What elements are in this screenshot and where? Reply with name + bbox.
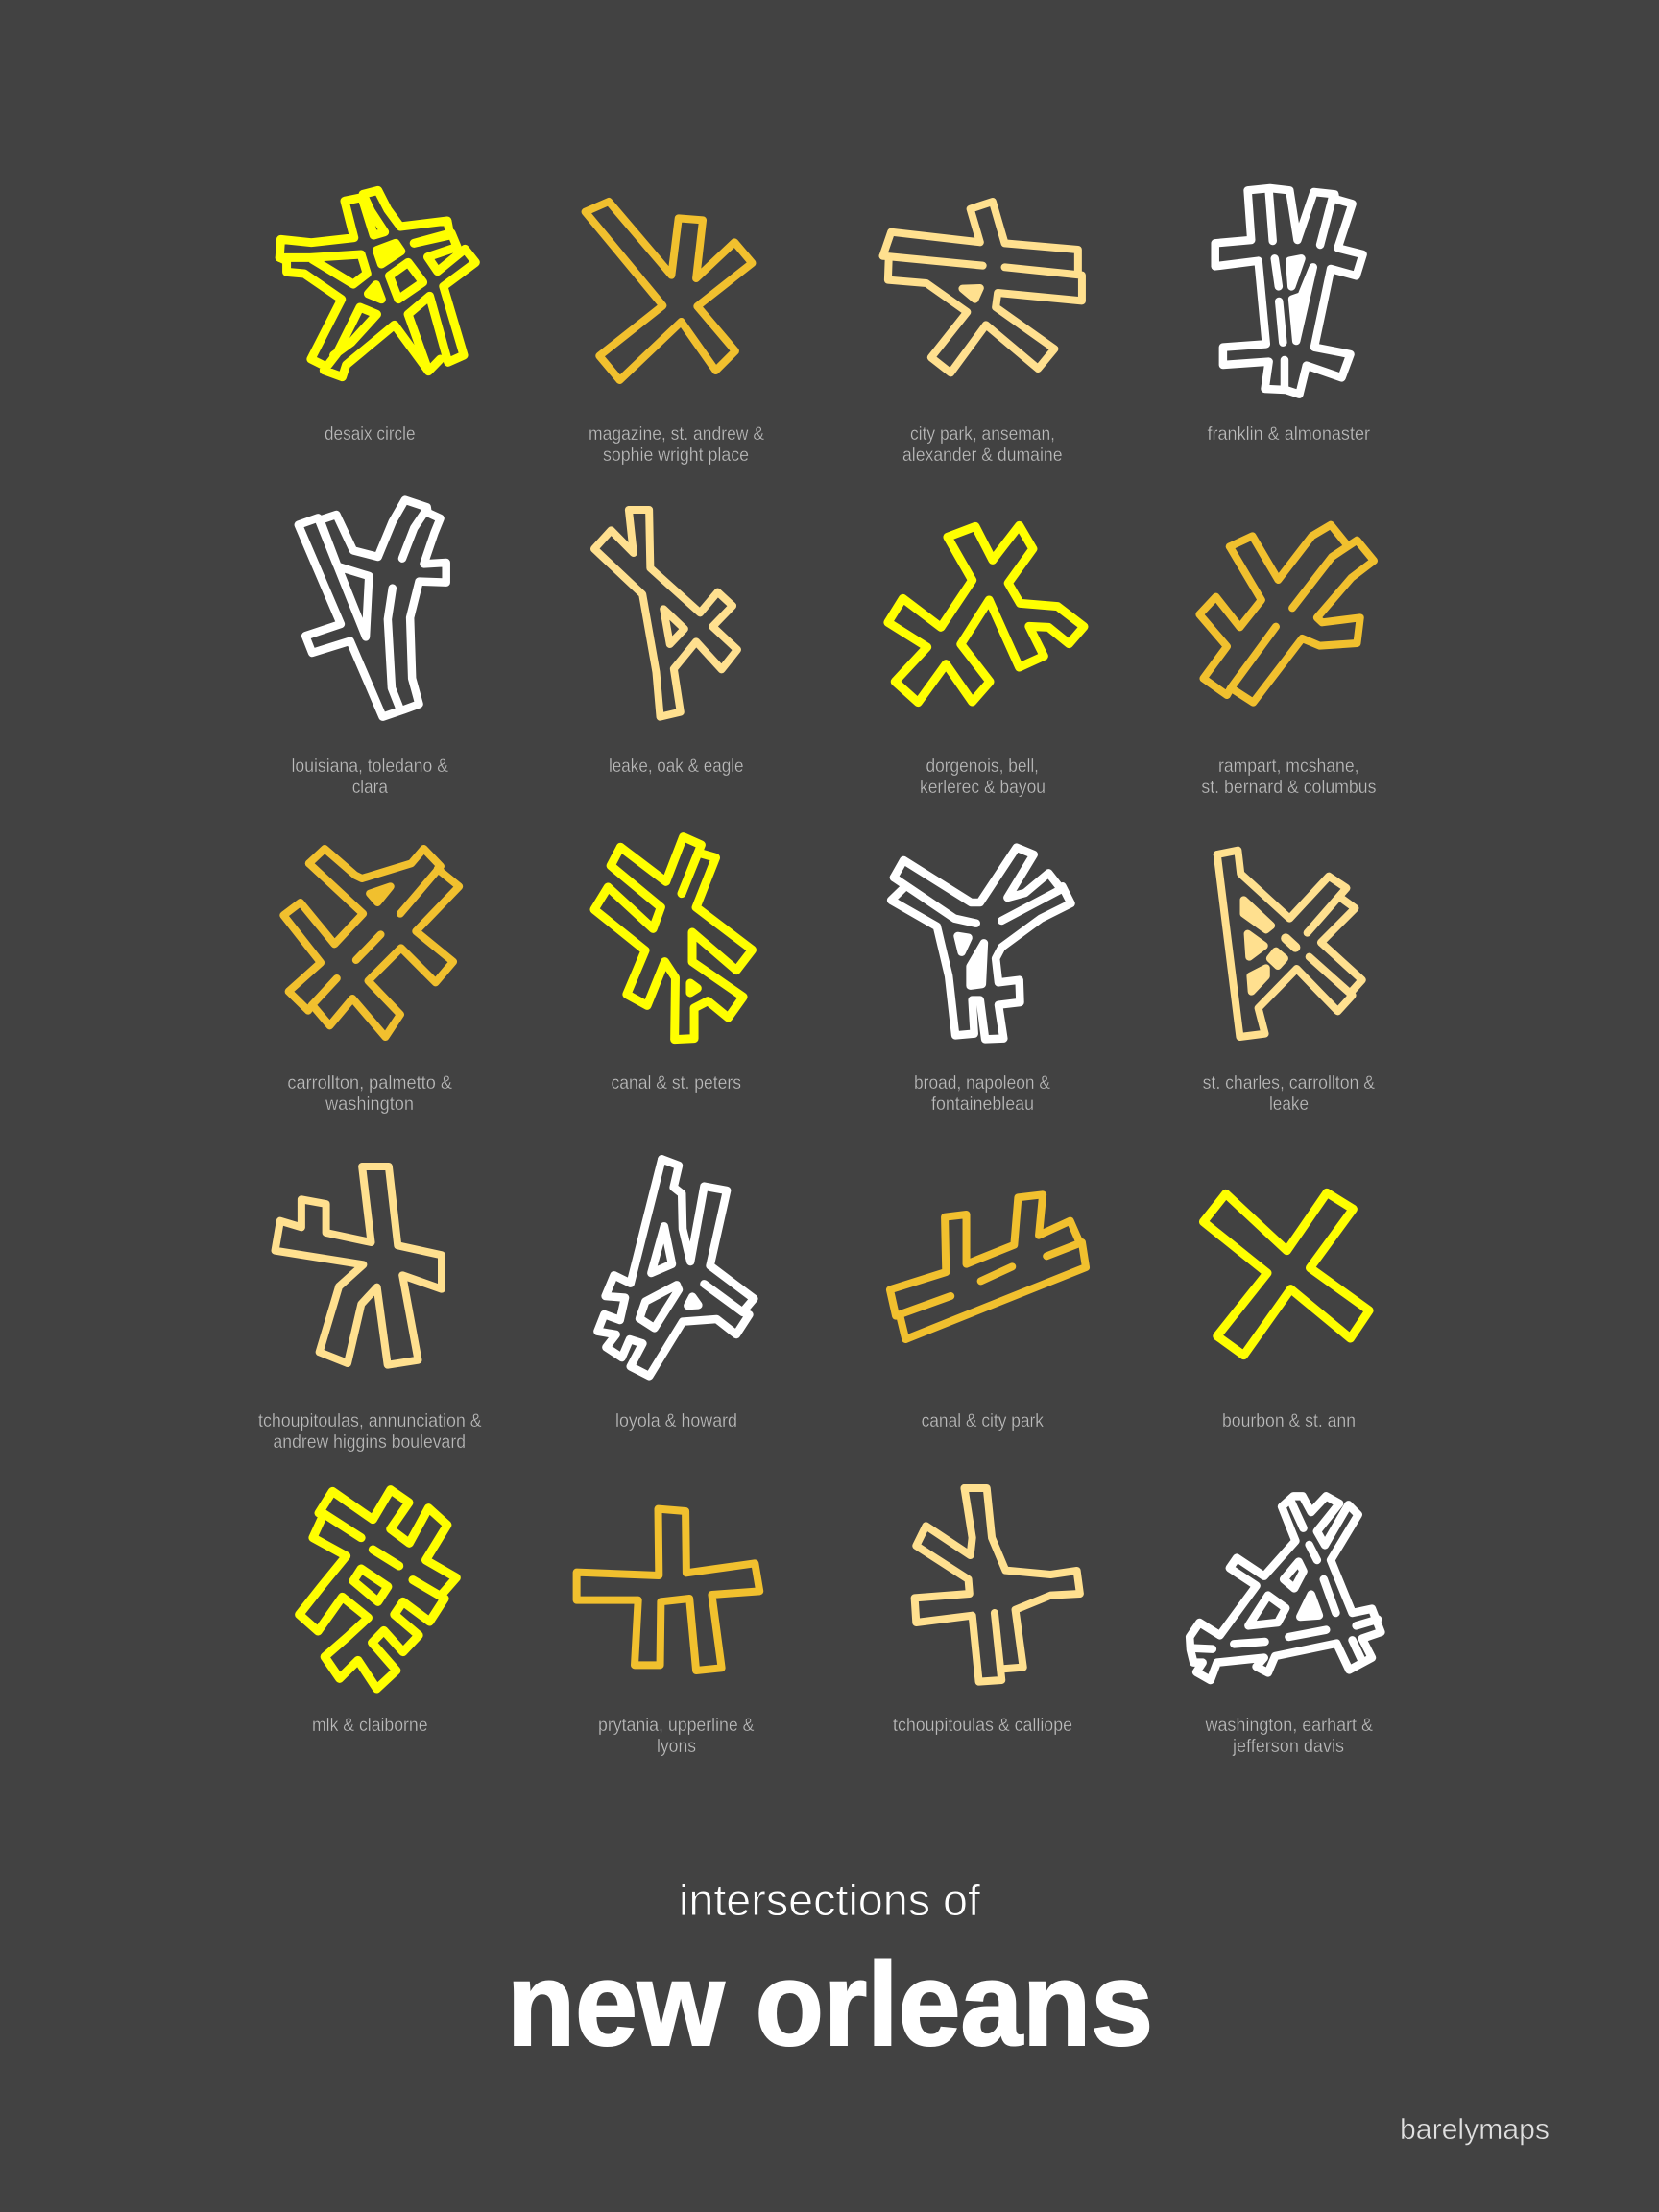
subtitle: intersections of	[679, 1875, 980, 1925]
label: rampart, mcshane, st. bernard & columbus	[1201, 757, 1377, 798]
label: canal & st. peters: canal & st. peters	[611, 1073, 741, 1094]
icon: louisiana intersection	[299, 500, 446, 717]
icon: mlk intersection	[300, 1490, 456, 1689]
icon: dorgenois intersection	[888, 525, 1084, 703]
label: carrollton, palmetto & washington: carrollton, palmetto &	[287, 1073, 452, 1094]
panel: canal & st. peters	[594, 837, 752, 1094]
label: st. charles, carrollton & leake: leake	[1269, 1094, 1309, 1115]
label: louisiana, toledano & clara: louisiana, toledano &	[292, 757, 448, 777]
panel: leake, oak & eagle	[594, 510, 743, 777]
label: carrollton, palmetto & washington: washington	[325, 1094, 414, 1115]
label: dorgenois, bell, kerlerec & bayou: kerlerec & bayou	[920, 778, 1046, 798]
label: magazine, st. andrew & sophie wright place: sophie wright place	[603, 445, 749, 466]
label: rampart, mcshane, st. bernard & columbus: rampart, mcshane,	[1218, 757, 1359, 777]
label: city park, anseman, alexander & dumaine: alexander & dumaine	[902, 445, 1062, 466]
panel: louisiana, toledano & clara	[292, 500, 448, 798]
label: bourbon & st. ann: bourbon & st. ann	[1222, 1411, 1356, 1431]
label: dorgenois, bell, kerlerec & bayou: dorgenois, bell,	[926, 757, 1039, 777]
label: washington, earhart & jefferson davis	[1205, 1716, 1373, 1757]
label: louisiana, toledano & clara	[292, 757, 448, 798]
icon: washington intersection	[1190, 1496, 1381, 1680]
label: canal & city park: canal & city park	[922, 1411, 1044, 1431]
label: franklin & almonaster: franklin & almonaster	[1208, 424, 1371, 445]
panel: washington, earhart & jefferson davis	[1190, 1496, 1381, 1757]
panel: mlk & claiborne	[300, 1490, 456, 1736]
panel: dorgenois, bell, kerlerec & bayou	[888, 525, 1084, 798]
label: tchoupitoulas, annunciation & andrew higgins boulevard	[258, 1411, 482, 1453]
icon: st. charles intersection	[1217, 851, 1362, 1037]
panel: magazine, st. andrew & sophie wright place	[586, 202, 764, 466]
label: magazine, st. andrew & sophie wright place: magazine, st. andrew &	[589, 424, 764, 445]
panel: desaix circle	[279, 190, 475, 445]
icon: prytania intersection	[577, 1509, 759, 1671]
label: tchoupitoulas & calliope: tchoupitoulas & calliope	[893, 1716, 1072, 1736]
label: loyola & howard: loyola & howard	[615, 1411, 737, 1431]
icon: leake intersection	[594, 510, 737, 717]
icon: tchoupitoulas and calliope intersection	[915, 1488, 1080, 1682]
panel: broad, napoleon & fontainebleau	[891, 848, 1071, 1115]
icon: carrollton intersection	[283, 849, 459, 1037]
icon: franklin intersection	[1215, 188, 1363, 395]
label: rampart, mcshane, st. bernard & columbus: st. bernard & columbus	[1201, 778, 1377, 798]
label: st. charles, carrollton & leake	[1203, 1073, 1375, 1115]
panel: city park, anseman, alexander & dumaine	[883, 202, 1082, 466]
label: st. charles, carrollton & leake: st. charles, carrollton &	[1203, 1073, 1375, 1094]
icon: desaix circle intersection	[279, 190, 475, 377]
label: washington, earhart & jefferson davis: jefferson davis	[1232, 1737, 1344, 1757]
panel: st. charles, carrollton & leake	[1203, 851, 1375, 1115]
panel: bourbon & st. ann	[1203, 1192, 1369, 1431]
icon: broad intersection	[891, 848, 1071, 1039]
label: prytania, upperline & lyons: lyons	[657, 1737, 696, 1757]
icon: rampart intersection	[1199, 525, 1374, 703]
panel: canal & city park	[890, 1194, 1086, 1431]
icon: tchoupitoulas and annunciation intersection	[276, 1166, 442, 1365]
label: dorgenois, bell, kerlerec & bayou	[920, 757, 1046, 798]
label: city park, anseman, alexander & dumaine	[902, 424, 1062, 466]
credit: barelymaps: barelymaps	[1400, 2112, 1550, 2146]
label: desaix circle: desaix circle	[325, 424, 415, 445]
panel: tchoupitoulas, annunciation & andrew higgins boulevard	[258, 1166, 482, 1453]
label: magazine, st. andrew & sophie wright place	[589, 424, 764, 466]
label: broad, napoleon & fontainebleau	[914, 1073, 1050, 1115]
panel: tchoupitoulas & calliope	[893, 1488, 1080, 1736]
label: broad, napoleon & fontainebleau: fontainebleau	[931, 1094, 1034, 1115]
icon: city park intersection	[883, 202, 1082, 373]
icon: canal and city park intersection	[890, 1194, 1086, 1339]
panel: carrollton, palmetto & washington	[283, 849, 459, 1115]
panel: prytania, upperline & lyons	[577, 1509, 759, 1757]
icon: magazine intersection	[586, 202, 752, 380]
icon: canal and st. peters intersection	[594, 837, 752, 1040]
label: city park, anseman, alexander & dumaine: city park, anseman,	[910, 424, 1055, 445]
label: leake, oak & eagle: leake, oak & eagle	[609, 757, 743, 777]
title: new orleans	[507, 1939, 1153, 2071]
label: prytania, upperline & lyons	[598, 1716, 755, 1757]
label: prytania, upperline & lyons: prytania, upperline &	[598, 1716, 755, 1736]
icon: loyola intersection	[597, 1159, 754, 1376]
label: washington, earhart & jefferson davis: washington, earhart &	[1205, 1716, 1373, 1736]
label: mlk & claiborne: mlk & claiborne	[312, 1716, 428, 1736]
label: louisiana, toledano & clara: clara	[352, 778, 388, 798]
panel: loyola & howard	[597, 1159, 754, 1431]
panel: franklin & almonaster	[1208, 188, 1371, 445]
label: tchoupitoulas, annunciation & andrew higgins boulevard: tchoupitoulas, annunciation &	[258, 1411, 482, 1431]
label: tchoupitoulas, annunciation & andrew higgins boulevard: andrew higgins boulevard	[273, 1432, 466, 1453]
panel: rampart, mcshane, st. bernard & columbus	[1199, 525, 1377, 798]
icon: bourbon intersection	[1203, 1192, 1369, 1356]
label: carrollton, palmetto & washington	[287, 1073, 452, 1115]
label: broad, napoleon & fontainebleau: broad, napoleon &	[914, 1073, 1050, 1094]
